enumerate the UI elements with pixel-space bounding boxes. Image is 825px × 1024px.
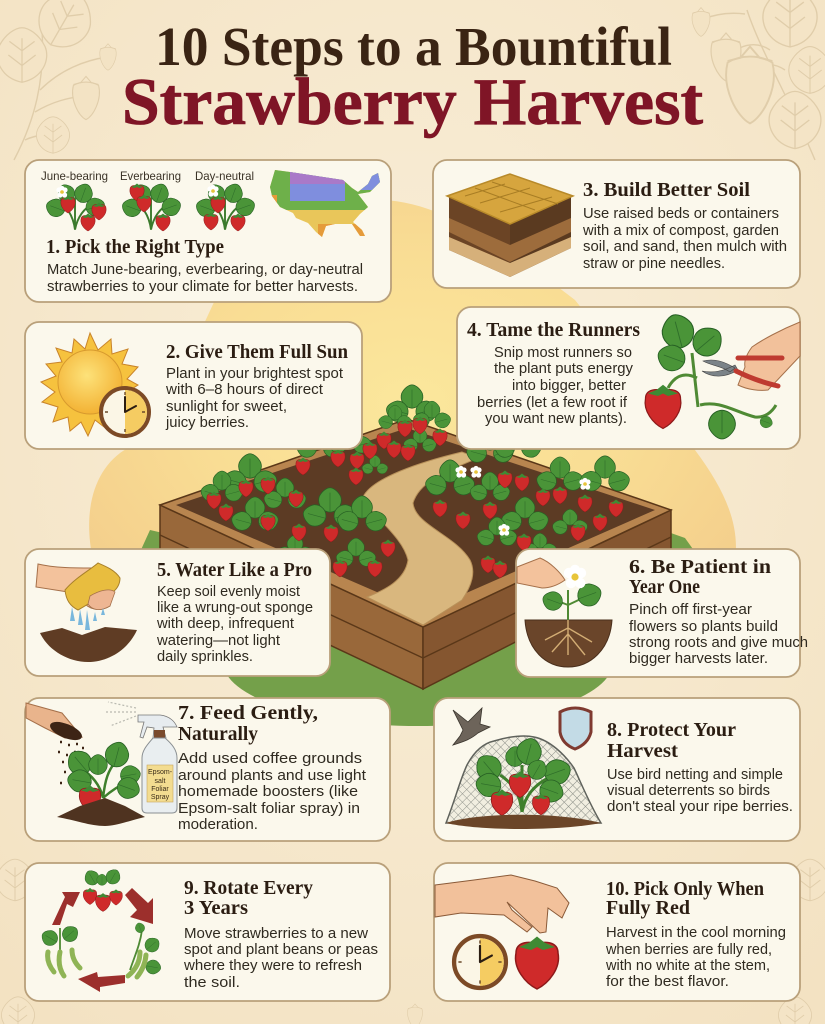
variety labels bbox=[41, 169, 254, 183]
variety labels: June-bearing bbox=[41, 169, 108, 183]
body text: Plant in your brightest spot bbox=[166, 366, 343, 382]
body text: with 6–8 hours of direct bbox=[165, 382, 323, 398]
heading bbox=[607, 719, 736, 762]
heading: 4. Tame the Runners bbox=[467, 319, 640, 341]
body text bbox=[47, 262, 363, 295]
body text bbox=[178, 751, 366, 833]
panel 7: feed gently, naturally bbox=[25, 698, 390, 841]
heading: 3. Build Better Soil bbox=[583, 179, 750, 201]
title bbox=[122, 16, 704, 139]
icon: three strawberry plants bbox=[44, 181, 257, 231]
heading: Naturally bbox=[178, 723, 258, 745]
sand path bbox=[363, 452, 478, 625]
body text: into bigger, better bbox=[512, 378, 626, 394]
icon: hand, plant and spray bottle: salt bbox=[155, 778, 165, 785]
body text: around plants and use light bbox=[178, 768, 366, 784]
body text: strawberries to your climate for better harvests. bbox=[47, 279, 358, 295]
icon: bird, shield and netted plant bbox=[446, 708, 601, 829]
panel 4: tame the runners bbox=[457, 307, 800, 449]
panel 1: pick the right type bbox=[25, 160, 391, 302]
body text: visual deterrents so birds bbox=[607, 783, 770, 799]
body text: with a mix of compost, garden bbox=[582, 223, 779, 239]
body text: don't steal your ripe berries. bbox=[607, 799, 793, 815]
body text: bigger harvests later. bbox=[629, 651, 768, 667]
icon: hand, plant and spray bottle: Foliar bbox=[151, 786, 169, 793]
body text bbox=[629, 602, 808, 667]
body text bbox=[477, 345, 634, 427]
icon: soil layers block bbox=[447, 174, 573, 277]
heading: 2. Give Them Full Sun bbox=[166, 341, 348, 363]
icon: hand, plant and spray bottle: Spray bbox=[151, 794, 170, 801]
icon: hand pinching flower with roots bbox=[517, 558, 612, 667]
body text bbox=[607, 767, 793, 815]
heading bbox=[184, 877, 313, 919]
icon: hand wringing sponge over soil bbox=[36, 563, 137, 662]
bed walls bbox=[160, 419, 671, 689]
body text: berries (let a few root if bbox=[477, 395, 628, 411]
title: Strawberry Harvest bbox=[122, 65, 704, 139]
heading: 8. Protect Your bbox=[607, 719, 736, 741]
body text: daily sprinkles. bbox=[157, 649, 253, 665]
body text: spot and plant beans or peas bbox=[184, 942, 378, 958]
body text: watering—not light bbox=[156, 633, 280, 649]
heading: 9. Rotate Every bbox=[184, 877, 313, 899]
body text: Match June-bearing, everbearing, or day-neutral bbox=[47, 262, 363, 278]
panel 10: pick only when fully red bbox=[434, 863, 800, 1001]
body text bbox=[156, 584, 313, 665]
icon: crop rotation cycle bbox=[39, 867, 162, 992]
heading bbox=[606, 878, 764, 919]
panel 8: protect your harvest bbox=[434, 698, 800, 841]
body text: where they were to refresh bbox=[183, 958, 362, 974]
body text: when berries are fully red, bbox=[605, 942, 772, 958]
body text: juicy berries. bbox=[165, 415, 249, 431]
heading: 5. Water Like a Pro bbox=[157, 559, 312, 581]
body text: Add used coffee grounds bbox=[178, 751, 362, 767]
body text: Pinch off first-year bbox=[629, 602, 752, 618]
icon: climate map bbox=[270, 170, 380, 237]
icon: hand, plant and spray bottle: Epsom- bbox=[148, 769, 173, 776]
heading: 3 Years bbox=[184, 897, 248, 919]
heading bbox=[629, 556, 771, 598]
heading: 10. Pick Only When bbox=[606, 878, 764, 900]
strawberry plants bbox=[199, 385, 632, 578]
body text: with no white at the stem, bbox=[605, 958, 770, 974]
body text: the soil. bbox=[184, 975, 240, 991]
body text: straw or pine needles. bbox=[583, 256, 725, 272]
heading: 1. Pick the Right Type bbox=[46, 236, 224, 258]
body text bbox=[582, 206, 787, 272]
body text: Snip most runners so bbox=[494, 345, 632, 361]
heading bbox=[178, 702, 318, 745]
icon: hand picking berry and clock bbox=[435, 875, 569, 989]
body text: Use raised beds or containers bbox=[583, 206, 779, 222]
body text: for the best flavor. bbox=[606, 974, 729, 990]
body text: with deep, infrequent bbox=[156, 616, 294, 632]
body text: homemade boosters (like bbox=[178, 784, 358, 800]
panel 2: full sun bbox=[25, 322, 362, 449]
body text: strong roots and give much bbox=[629, 635, 808, 651]
body text bbox=[165, 366, 343, 431]
soil bbox=[176, 428, 655, 612]
body text: flowers so plants build bbox=[629, 619, 778, 635]
panel 5: water like a pro bbox=[25, 549, 330, 676]
panel 9: rotate every 3 years bbox=[25, 863, 390, 1001]
sun glow backdrop bbox=[89, 200, 736, 650]
body text bbox=[605, 925, 786, 990]
variety labels: Day-neutral bbox=[195, 169, 254, 183]
icon: hand, plant and spray bottle bbox=[26, 702, 177, 826]
body text: Use bird netting and simple bbox=[607, 767, 783, 783]
heading: 6. Be Patient in bbox=[629, 556, 771, 578]
heading: 7. Feed Gently, bbox=[178, 702, 318, 724]
body text: Harvest in the cool morning bbox=[606, 925, 786, 941]
body text: sunlight for sweet, bbox=[166, 399, 287, 415]
heading: Harvest bbox=[607, 740, 678, 762]
variety labels: Everbearing bbox=[120, 169, 181, 183]
heading: Year One bbox=[629, 576, 700, 598]
body text: Keep soil evenly moist bbox=[157, 584, 300, 600]
body text: the plant puts energy bbox=[494, 361, 634, 377]
raised garden bed bbox=[160, 385, 671, 689]
body text: soil, and sand, then mulch with bbox=[583, 239, 787, 255]
heading: Fully Red bbox=[606, 897, 690, 919]
title: 10 Steps to a Bountiful bbox=[155, 16, 672, 77]
body text: like a wrung-out sponge bbox=[157, 600, 313, 616]
body text: you want new plants). bbox=[485, 411, 627, 427]
body text: Epsom-salt foliar spray) in bbox=[178, 801, 360, 817]
panel 6: be patient in year one bbox=[516, 549, 808, 677]
body text: Move strawberries to a new bbox=[184, 926, 368, 942]
icon: plant with runner and pruners bbox=[645, 311, 800, 439]
grass bbox=[140, 530, 695, 726]
panel 3: build better soil bbox=[433, 160, 800, 288]
body text: moderation. bbox=[178, 817, 258, 833]
icon: sun and clock bbox=[41, 333, 149, 436]
body text bbox=[183, 926, 378, 991]
